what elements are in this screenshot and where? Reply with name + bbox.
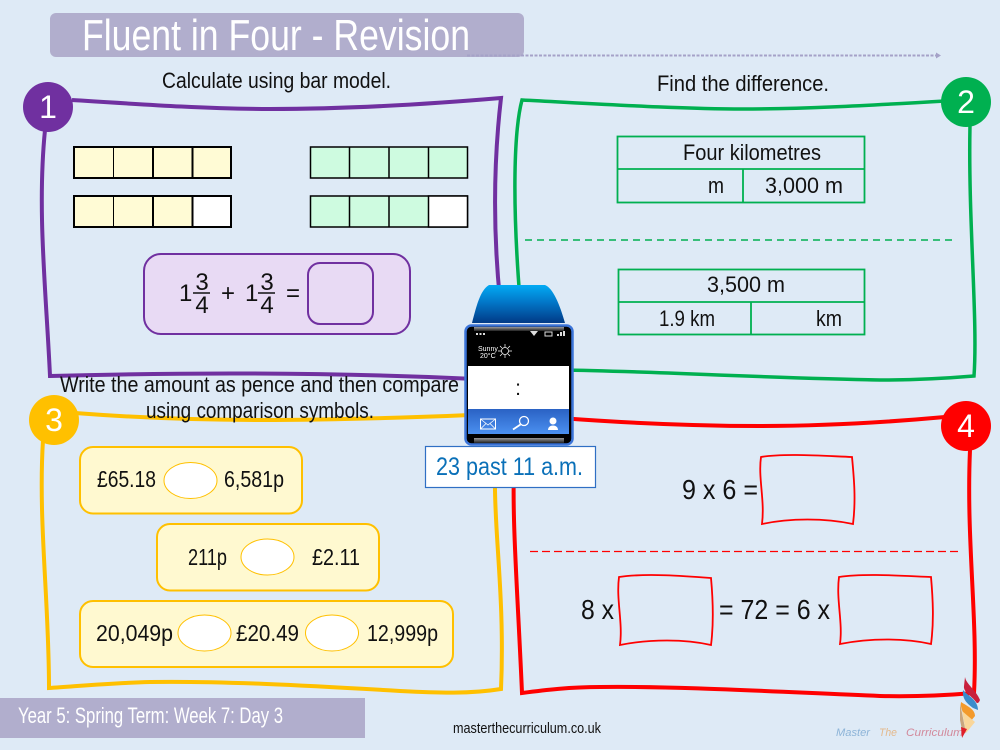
weather readout: Sunny	[478, 346, 498, 353]
status icons	[476, 331, 565, 336]
panel 2 number badge	[941, 77, 991, 127]
comparison row 2: £2.11	[312, 544, 360, 570]
panel 4 number badge: 4	[957, 408, 975, 444]
panel 1 number badge	[23, 82, 73, 132]
smartwatch clock	[466, 285, 572, 444]
panel 3 number badge: 3	[45, 402, 63, 438]
fraction sum box: 3	[260, 269, 274, 296]
panel 2 number badge: 2	[957, 84, 975, 120]
table: 3,500 m: 1.9 km	[659, 306, 715, 331]
Master The Curriculum logo	[836, 677, 980, 739]
answer box: 9 x 6	[760, 455, 855, 524]
comparison row 3: 12,999p	[367, 620, 438, 646]
dotted arrow under title	[467, 52, 941, 58]
bar model: yellow three quarters	[74, 196, 231, 227]
panel 3 number badge	[29, 395, 79, 445]
comparison row 2: 211p	[188, 544, 227, 570]
panel 3 instruction: Write the amount as pence and then compare	[60, 372, 459, 397]
watch strap	[472, 285, 565, 323]
weather readout: 20°C	[480, 352, 496, 360]
table: four kilometres: m	[708, 173, 724, 198]
equation: 8 x box = 72 = 6 x box	[581, 575, 933, 645]
table: 3,500 m: km	[816, 306, 842, 331]
comparison row 2	[157, 524, 379, 590]
dashed divider	[530, 550, 960, 552]
comparison row 1: 6,581p	[224, 466, 284, 492]
dashed divider	[525, 239, 957, 241]
bar model: green whole	[310, 147, 468, 178]
table: four kilometres	[617, 136, 865, 202]
Master The Curriculum logo: Curriculum	[906, 727, 963, 739]
footer label: Year 5: Spring Term: Week 7: Day 3	[18, 703, 283, 728]
panel 2 frame	[515, 100, 975, 380]
equation: 8 x box = 72 = 6 x box: = 72 = 6 x	[719, 594, 830, 625]
footer label	[0, 698, 365, 738]
fraction sum box: 4	[260, 292, 274, 319]
panel 1 instruction: Calculate using bar model.	[162, 68, 391, 93]
fraction sum box: 1	[179, 280, 192, 307]
panel 4: multiplication	[514, 401, 991, 696]
fraction sum box: =	[286, 280, 300, 307]
panel 1 number badge: 1	[39, 89, 57, 125]
comparison row 3: 20,049p	[96, 620, 173, 646]
fraction sum box: 1	[245, 280, 258, 307]
home bar	[474, 438, 564, 443]
panel 1: bar model	[23, 68, 501, 379]
bar model: green three quarters	[310, 196, 468, 227]
panel 1 frame	[42, 98, 501, 379]
comparison row 3	[80, 601, 453, 667]
Master The Curriculum logo: The	[879, 727, 897, 739]
comparison row 3: £20.49	[236, 620, 299, 646]
panel 2: find the difference	[515, 71, 991, 380]
panel 2 instruction: Find the difference.	[657, 71, 829, 96]
panel 4 frame	[514, 417, 975, 696]
panel 4 number badge	[941, 401, 991, 451]
time caption: 23 past 11 a.m.	[436, 453, 583, 481]
website: masterthecurriculum.co.uk	[453, 720, 601, 737]
comparison row 1	[80, 447, 302, 514]
panel 3: pence comparison	[29, 372, 502, 693]
comparison row 1: £65.18	[97, 466, 156, 492]
Master The Curriculum logo: Master	[836, 727, 871, 739]
time display: :	[515, 377, 521, 400]
icon: pencil	[960, 677, 980, 738]
table: four kilometres: 3,000 m	[765, 173, 843, 198]
time display	[468, 366, 569, 409]
weather readout	[478, 344, 512, 360]
equation: 8 x box = 72 = 6 x box: 8 x	[581, 594, 614, 625]
fraction sum box: 4	[195, 292, 209, 319]
equation: 9 x 6: 9 x 6 =	[682, 474, 758, 505]
panel 3: pence comparison: using comparison symbols.	[146, 398, 374, 423]
watch body	[466, 326, 572, 444]
table: 3,500 m	[618, 270, 865, 335]
table: four kilometres: Four kilometres	[683, 140, 821, 165]
table: 3,500 m: 3,500 m	[707, 272, 785, 297]
fraction sum box: 3	[195, 269, 209, 296]
time caption	[426, 446, 596, 488]
fraction sum box	[144, 254, 410, 334]
bar model: yellow whole	[74, 147, 231, 178]
fraction sum box: +	[221, 280, 235, 307]
title banner: Fluent in Four - Revision	[82, 11, 470, 60]
app icon bar	[468, 409, 569, 434]
panel 3 frame	[42, 413, 502, 693]
